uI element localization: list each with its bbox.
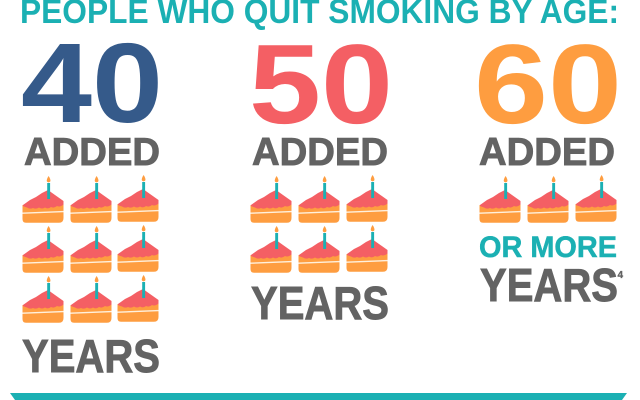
panel: age 60 [474,21,624,311]
panel: age 50 [249,21,393,329]
label: added: ADDED [479,131,615,174]
number 60: 60 [474,21,622,147]
number 40: 40 [21,20,163,146]
label: years with footnote: 4 [618,270,624,281]
panel: age 40 [21,20,163,382]
label: added: ADDED [252,131,388,174]
label: years with footnote: YEARS [480,259,618,311]
label: added: ADDED [24,131,160,174]
label: years: YEARS [22,330,160,382]
icons: six birthday cakes [250,175,388,273]
icons: nine birthday cakes [22,175,158,323]
label: years: YEARS [251,277,389,329]
bottom teal band [10,393,627,400]
icons: three birthday cakes [480,175,616,223]
label: or more: OR MORE [479,231,617,264]
number 50: 50 [249,21,393,147]
